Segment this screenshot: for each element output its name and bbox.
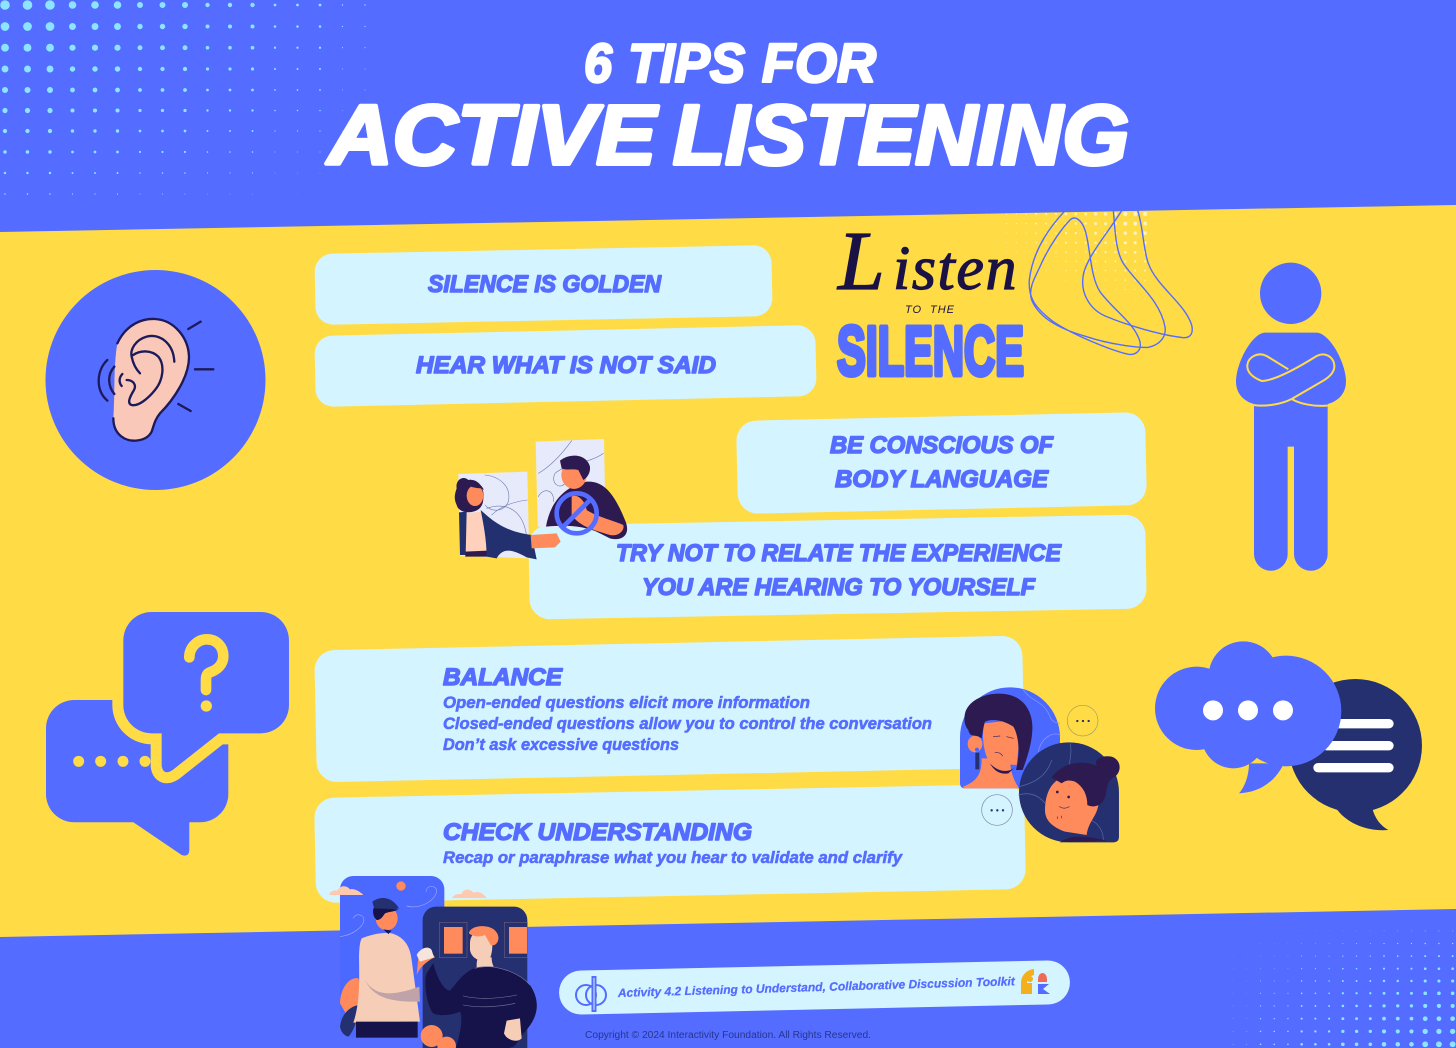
logo: foundation mark	[1021, 969, 1050, 994]
icon: person with crossed arms	[1236, 263, 1346, 571]
man	[546, 456, 627, 539]
no sign	[557, 493, 597, 533]
dot pattern: top left	[5, 5, 366, 194]
dot pattern: bottom right	[1232, 931, 1453, 1044]
panel: check understanding	[314, 784, 1026, 903]
title line one: FOR	[762, 32, 876, 94]
title line two: ACTIVE	[326, 88, 659, 182]
squiggle lines	[1029, 209, 1192, 354]
woman	[455, 478, 561, 559]
footer citation pill	[559, 960, 1070, 1015]
block word silence: SILENCE	[837, 312, 1024, 390]
card swirls	[340, 886, 437, 937]
panel: body language	[736, 412, 1147, 514]
tip heading line two: YOU ARE HEARING TO YOURSELF	[642, 574, 1036, 601]
woman's photo card	[458, 472, 529, 558]
three dots	[1203, 700, 1293, 720]
title	[326, 32, 1129, 182]
card swirl lines	[1018, 743, 1103, 840]
text bars	[1318, 724, 1389, 768]
dot pattern: yellow area top right	[986, 214, 1145, 299]
illustration: two people with no sign	[455, 439, 627, 559]
script word listen: L	[837, 215, 885, 308]
panel: hear what is not said	[314, 325, 817, 407]
upper bubble	[123, 612, 289, 772]
clouds	[329, 886, 487, 898]
head	[1260, 263, 1321, 324]
navy bubble	[1289, 679, 1422, 830]
small words: TO THE	[905, 304, 955, 316]
icon: speech bubbles with question	[46, 612, 289, 856]
title line two: LISTENING	[673, 88, 1129, 182]
man in cream shirt	[353, 898, 435, 1038]
tip heading: SILENCE IS GOLDEN	[428, 271, 662, 298]
title line one: 6	[584, 32, 612, 94]
question mark	[189, 639, 223, 712]
tip heading line one: BE CONSCIOUS OF	[830, 432, 1054, 459]
balance line three: Don’t ask excessive questions	[443, 735, 679, 754]
panel: silence is golden	[314, 245, 773, 325]
citation text: Activity 4.2 Listening to Understand, Collaborative Discussion Toolkit	[617, 974, 1016, 1000]
woman's arch card	[960, 687, 1060, 788]
tip heading line one: TRY NOT TO RELATE THE EXPERIENCE	[616, 540, 1062, 567]
man's photo card	[536, 439, 606, 528]
lettering: listen to the silence	[837, 215, 1024, 390]
dots	[73, 756, 150, 767]
check understanding text: Recap or paraphrase what you hear to validate and clarify	[443, 848, 904, 867]
balance line one: Open-ended questions elicit more information	[443, 693, 810, 712]
balance heading: BALANCE	[443, 664, 563, 691]
script word listen: isten	[893, 235, 1018, 303]
panel: balance	[314, 636, 1025, 782]
check understanding heading: CHECK UNDERSTANDING	[443, 819, 752, 846]
icon: ear in blue circle	[46, 270, 266, 490]
tip heading: HEAR WHAT IS NOT SAID	[416, 352, 716, 379]
balance line two: Closed-ended questions allow you to control the conversation	[443, 714, 932, 733]
bottom blue footer band	[0, 909, 1456, 1048]
woman's face	[963, 694, 1032, 788]
card scribbles	[485, 441, 603, 537]
legs	[1254, 400, 1328, 571]
tip heading line two: BODY LANGUAGE	[835, 466, 1049, 493]
card swirl lines	[1023, 690, 1061, 752]
blue card	[340, 876, 444, 1038]
man in dark sweater	[421, 926, 537, 1048]
woman with bun face	[1045, 756, 1120, 842]
arm outline	[1247, 354, 1334, 406]
title line one: TIPS	[628, 32, 745, 94]
icon: cloud and round speech bubbles	[1155, 641, 1422, 830]
man's arch card	[1019, 742, 1119, 842]
blue cloud bubble	[1155, 641, 1341, 793]
small speech bubbles	[982, 705, 1098, 825]
orange sun and windows	[396, 881, 527, 958]
copyright line: Copyright © 2024 Interactivity Foundation. All Rights Reserved.	[585, 1030, 871, 1041]
lower bubble	[46, 700, 228, 856]
torso and arms	[1236, 333, 1346, 405]
logo: conversation mark	[576, 977, 606, 1011]
navy card	[423, 907, 527, 1048]
illustration: two men shaking hands	[329, 876, 537, 1048]
top blue header band	[0, 0, 1456, 232]
illustration: two faces and small speech bubbles	[960, 687, 1120, 842]
plants	[340, 978, 361, 1037]
panel: try not to relate	[528, 515, 1147, 619]
